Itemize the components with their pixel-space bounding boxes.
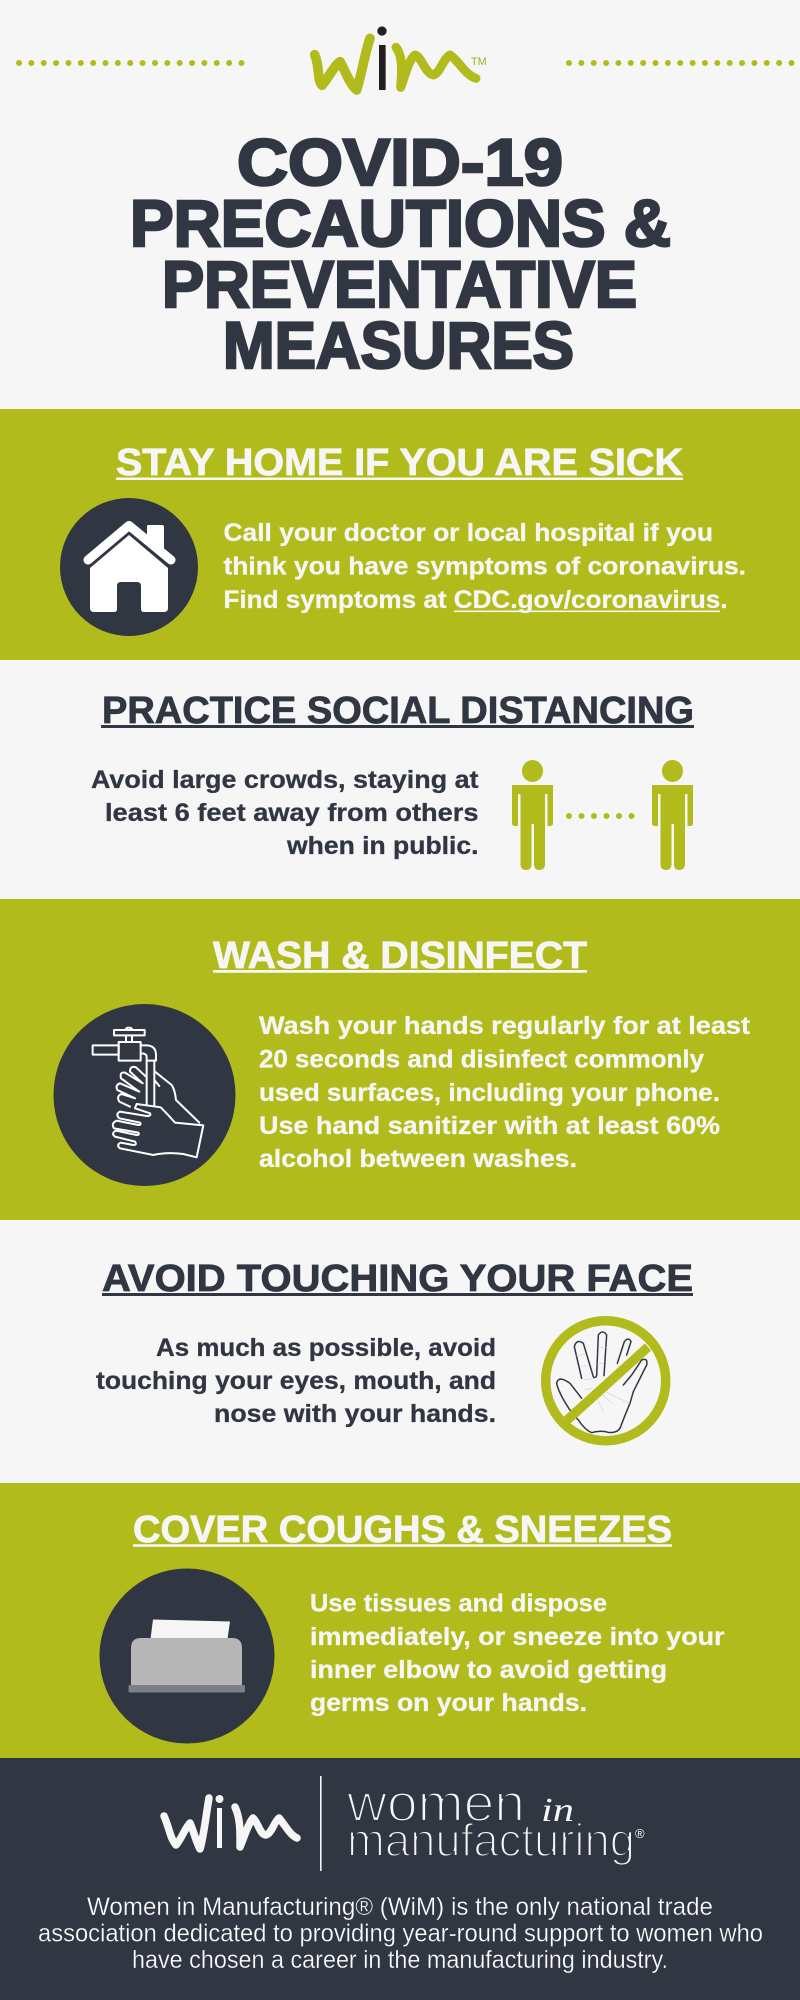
text: footer description <box>38 1893 763 1974</box>
panel: cover coughs and sneezes <box>0 1483 800 1758</box>
heading: wash and disinfect: WASH & DISINFECT <box>213 935 587 977</box>
text: cover coughs body: germs on your hands. <box>310 1689 587 1717</box>
heading: cover coughs: COVER COUGHS & SNEEZES <box>133 1509 672 1551</box>
text: cover coughs body: immediately, or sneeze into your <box>310 1623 725 1651</box>
text: wash and disinfect body: 20 seconds and disinfect commonly <box>259 1046 704 1074</box>
text: avoid touching body <box>96 1334 496 1428</box>
text: wash and disinfect body: Use hand sanitizer with at least 60% <box>259 1112 720 1140</box>
text: wash and disinfect body: used surfaces, including your phone. <box>259 1079 720 1107</box>
icon: white WiM logo <box>164 1795 297 1849</box>
heading: stay home: STAY HOME IF YOU ARE SICK <box>116 442 684 484</box>
title: COVID-19 <box>237 125 563 199</box>
text: stay home body: Find symptoms at CDC.gov/coronavirus. <box>224 586 728 614</box>
panel: footer <box>0 1758 800 2000</box>
text: cover coughs body <box>310 1590 725 1717</box>
text: wash and disinfect body <box>259 1012 751 1173</box>
header logo row <box>19 26 792 90</box>
heading: social distancing: PRACTICE SOCIAL DISTANCING <box>102 690 694 732</box>
title: PREVENTATIVE <box>162 247 637 321</box>
icon: washing hands under tap <box>54 1004 236 1186</box>
text: social distancing body: when in public. <box>286 832 478 860</box>
text: cover coughs body: inner elbow to avoid getting <box>310 1656 667 1684</box>
panel: social distancing <box>0 660 800 899</box>
text: cover coughs body: Use tissues and dispose <box>310 1590 607 1618</box>
panel: wash and disinfect <box>0 899 800 1220</box>
text: stay home body: think you have symptoms of coronavirus. <box>224 552 746 580</box>
text: wash and disinfect body: Wash your hands regularly for at least <box>259 1012 751 1040</box>
divider <box>320 1776 322 1871</box>
icon: house <box>60 498 198 636</box>
title: PRECAUTIONS & <box>130 186 671 260</box>
wordmark: women in manufacturing: women <box>346 1774 525 1833</box>
wordmark: women in manufacturing <box>346 1774 645 1866</box>
text: avoid touching body: touching your eyes, mouth, and <box>96 1367 496 1395</box>
text: wash and disinfect body: alcohol between washes. <box>259 1145 577 1173</box>
text: footer description: have chosen a career in the manufacturing industry. <box>132 1946 668 1974</box>
text: social distancing body <box>91 766 479 860</box>
icon: two people apart <box>512 760 693 870</box>
title <box>130 125 671 382</box>
text: avoid touching body: nose with your hands. <box>214 1400 496 1428</box>
icon: person left <box>512 760 553 870</box>
icon: WiM logo <box>315 26 487 90</box>
panel: stay home <box>0 409 800 660</box>
icon: WiM logo: TM <box>471 56 487 68</box>
panel: avoid touching face <box>0 1220 800 1483</box>
text: social distancing body: Avoid large crowds, staying at <box>91 766 479 794</box>
text: avoid touching body: As much as possible, avoid <box>156 1334 496 1362</box>
wordmark: women in manufacturing: in <box>541 1792 574 1829</box>
wordmark: women in manufacturing: manufacturing <box>347 1814 635 1866</box>
text: footer description: Women in Manufacturing® (WiM) is the only national trade <box>87 1893 713 1921</box>
text: stay home body: Call your doctor or local hospital if you <box>224 519 713 547</box>
heading: avoid touching face: AVOID TOUCHING YOUR FACE <box>102 1258 693 1300</box>
text: footer description: association dedicated to providing year-round support to women who <box>38 1920 763 1948</box>
title: MEASURES <box>223 308 574 382</box>
icon: tissue box <box>100 1568 274 1744</box>
wordmark: women in manufacturing: ® <box>635 1826 645 1841</box>
icon: crossed out hand <box>546 1321 666 1441</box>
icon: person right <box>652 760 693 870</box>
text: social distancing body: least 6 feet away from others <box>105 799 479 827</box>
text: stay home body <box>224 519 746 614</box>
